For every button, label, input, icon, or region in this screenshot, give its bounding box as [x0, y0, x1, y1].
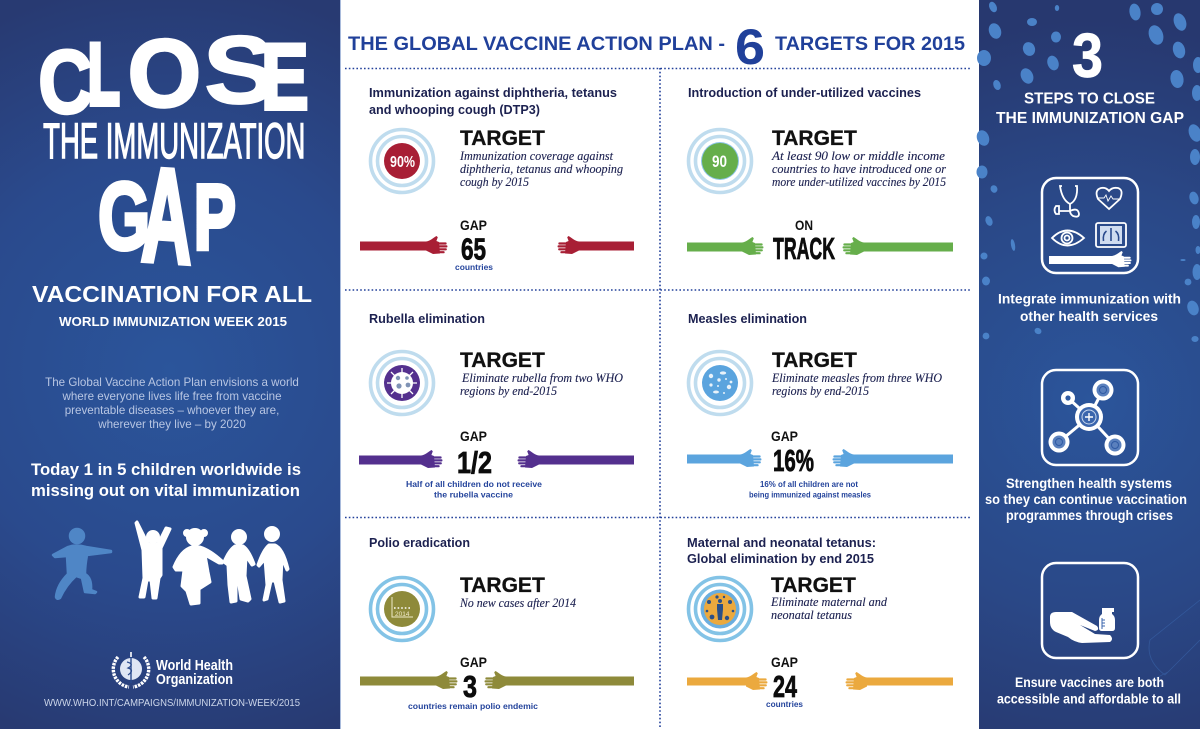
- title: Close the Immunization Gap brush lettering: S: [202, 16, 278, 125]
- heading: six targets for 2015: 6: [735, 19, 765, 75]
- subtitle: vaccination for all: VACCINATION FOR ALL: [32, 281, 312, 307]
- subtitle: vaccination for all: WORLD IMMUNIZATION WEEK 2015: [59, 315, 287, 329]
- title: Close the Immunization Gap brush lettering: A: [140, 141, 193, 292]
- icon: polio 2014 circle: 2014: [395, 611, 410, 618]
- panel: maternal and neonatal tetanus target: Maternal and neonatal tetanus:: [687, 536, 876, 550]
- number: 3 steps: 3: [1072, 22, 1103, 91]
- title: Close the Immunization Gap brush lettering: C: [37, 32, 94, 134]
- panel: left blue column background: [0, 0, 340, 729]
- title: Close the Immunization Gap brush lettering: G: [98, 163, 150, 270]
- panel: measles target: being immunized against measles: [749, 490, 871, 500]
- icon: reaching hands purple: [359, 450, 634, 468]
- panel: measles target: Eliminate measles from three WHO: [771, 371, 942, 385]
- panel: DTP3 target: TARGET: [460, 127, 545, 150]
- panel: maternal and neonatal tetanus target: Global elimination by end 2015: [687, 552, 874, 566]
- icon: 90 percent target circle: 90%: [390, 154, 415, 171]
- icon: reaching hands red: [360, 236, 634, 254]
- text block: 1 in 5 children statement: missing out on vital immunization: [31, 482, 300, 500]
- title: Close the Immunization Gap brush lettering: E: [261, 24, 309, 129]
- text: World Health Organization wordmark: World Health: [156, 658, 233, 674]
- decorative: vaccine droplets pattern: [975, 0, 1200, 342]
- panel: polio target: No new cases after 2014: [459, 596, 576, 610]
- panel: rubella target: [359, 312, 634, 500]
- panel: polio target: TARGET: [460, 574, 545, 597]
- panel: DTP3 target: 65: [461, 232, 486, 266]
- icon: reaching hands green: [687, 237, 953, 255]
- panel: rubella target: Half of all children do not receive: [406, 479, 542, 489]
- panel: maternal and neonatal tetanus target: TARGET: [771, 574, 856, 597]
- icon: mother and child circle: [688, 578, 752, 640]
- panel: maternal and neonatal tetanus target: [687, 536, 953, 709]
- text: integrate immunization caption: [998, 292, 1181, 324]
- panel: polio target: GAP: [460, 654, 487, 670]
- icon: polio 2014 circle: [370, 578, 434, 640]
- panel: under-utilized vaccines target: countries to have introduced one or: [772, 162, 946, 176]
- heading: six targets for 2015: [348, 19, 965, 75]
- icon: reaching hands olive: [360, 671, 634, 689]
- text block: 1 in 5 children statement: Today 1 in 5 children worldwide is: [31, 461, 301, 479]
- icon: rubella virus circle: [370, 352, 434, 414]
- panel: under-utilized vaccines target: Introduction of under-utilized vaccines: [688, 86, 921, 100]
- panel: under-utilized vaccines target: [687, 86, 953, 266]
- subtitle: vaccination for all: [32, 281, 312, 329]
- heading: six targets for 2015: THE GLOBAL VACCINE ACTION PLAN -: [348, 33, 725, 55]
- text: integrate immunization caption: Integrate immunization with: [998, 292, 1181, 306]
- panel: maternal and neonatal tetanus target: GAP: [771, 654, 798, 670]
- panel: under-utilized vaccines target: TRACK: [773, 231, 835, 266]
- text: ensure vaccines caption: Ensure vaccines are both: [1015, 675, 1164, 690]
- panel: under-utilized vaccines target: ON: [795, 217, 813, 233]
- title: Close the Immunization Gap brush lettering: L: [88, 27, 120, 123]
- text block: vision paragraph: preventable diseases – whoever they are,: [65, 404, 279, 417]
- panel: rubella target: TARGET: [460, 349, 545, 372]
- icon: health systems network box: [1042, 370, 1138, 465]
- icon: 90 countries target circle: 90: [712, 152, 727, 171]
- panel: maternal and neonatal tetanus target: neonatal tetanus: [771, 608, 852, 622]
- panel: polio target: countries remain polio endemic: [408, 701, 538, 711]
- panel: maternal and neonatal tetanus target: countries: [766, 699, 803, 709]
- panel: centre white targets column: [340, 0, 979, 729]
- icon: hand holding vaccine vial box: [1042, 563, 1138, 658]
- panel: measles target: 16%: [773, 443, 814, 478]
- panel: DTP3 target: GAP: [460, 217, 487, 233]
- panel: maternal and neonatal tetanus target: 24: [773, 669, 798, 704]
- text block: 1 in 5 children statement: [31, 461, 301, 500]
- icon: reaching hands orange: [687, 672, 953, 690]
- text: campaign URL: WWW.WHO.INT/CAMPAIGNS/IMMUNIZATION-WEEK/2015: [44, 697, 300, 709]
- text block: vision paragraph: wherever they live – by 2020: [97, 418, 246, 431]
- panel: DTP3 target: Immunization coverage against: [459, 149, 614, 163]
- text block: vision paragraph: [45, 376, 299, 431]
- title: Close the Immunization Gap brush lettering: [37, 16, 309, 292]
- panel: DTP3 target: and whooping cough (DTP3): [369, 103, 540, 117]
- text: integrate immunization caption: other health services: [1020, 309, 1158, 324]
- title: Close the Immunization Gap brush lettering: THE IMMUNIZATION: [43, 113, 305, 169]
- text block: vision paragraph: where everyone lives life free from vaccine: [61, 390, 282, 403]
- heading: steps to close the immunization gap: THE IMMUNIZATION GAP: [996, 110, 1184, 127]
- icon: five children silhouettes: [53, 522, 288, 604]
- panel: rubella target: 1/2: [457, 445, 492, 480]
- panel: rubella target: regions by end-2015: [460, 384, 557, 398]
- panel: maternal and neonatal tetanus target: Eliminate maternal and: [770, 595, 888, 609]
- icon: 90 percent target circle: [370, 130, 434, 192]
- panel: under-utilized vaccines target: At least 90 low or middle income: [771, 149, 945, 163]
- title: Close the Immunization Gap brush lettering: O: [127, 20, 202, 128]
- panel: polio target: Polio eradication: [369, 536, 470, 550]
- panel: DTP3 target: cough by 2015: [460, 175, 529, 189]
- panel: measles target: [687, 312, 953, 500]
- panel: polio target: 3: [463, 669, 477, 704]
- panel: DTP3 target: [360, 86, 634, 272]
- panel: measles target: TARGET: [772, 349, 857, 372]
- panel: DTP3 target: diphtheria, tetanus and whooping: [460, 162, 623, 176]
- panel: rubella target: GAP: [460, 428, 487, 444]
- text: World Health Organization wordmark: Organization: [156, 672, 233, 688]
- panel: rubella target: Eliminate rubella from two WHO: [461, 371, 623, 385]
- panel: rubella target: the rubella vaccine: [434, 490, 513, 500]
- heading: six targets for 2015: TARGETS FOR 2015: [775, 33, 965, 55]
- icon: integrated health services box: [1042, 178, 1138, 273]
- panel: measles target: Measles elimination: [688, 312, 807, 326]
- panel: measles target: 16% of all children are not: [760, 479, 858, 489]
- text: strengthen health systems caption: [985, 476, 1187, 523]
- text: ensure vaccines caption: accessible and affordable to all: [997, 692, 1181, 706]
- heading: steps to close the immunization gap: [996, 90, 1184, 127]
- panel: under-utilized vaccines target: TARGET: [772, 127, 857, 150]
- text: ensure vaccines caption: [997, 675, 1181, 706]
- icon: reaching hands blue: [687, 449, 953, 467]
- panel: under-utilized vaccines target: more under-utilized vaccines by 2015: [772, 175, 946, 189]
- panel: measles target: GAP: [771, 428, 798, 444]
- icon: 90 countries target circle: [688, 130, 752, 192]
- panel: DTP3 target: countries: [455, 262, 493, 272]
- text: World Health Organization wordmark: [156, 658, 233, 688]
- panel: polio target: [360, 536, 634, 711]
- icon: World Health Organization emblem: [113, 652, 149, 687]
- text: strengthen health systems caption: programmes through crises: [1006, 508, 1173, 523]
- text: strengthen health systems caption: so they can continue vaccination: [985, 492, 1187, 507]
- icon: measles cells circle: [688, 352, 752, 414]
- text block: vision paragraph: The Global Vaccine Action Plan envisions a world: [45, 376, 299, 389]
- panel: right blue steps column background: [979, 0, 1200, 729]
- text: strengthen health systems caption: Strengthen health systems: [1006, 476, 1172, 491]
- title: Close the Immunization Gap brush lettering: P: [194, 167, 236, 269]
- panel: DTP3 target: Immunization against diphtheria, tetanus: [369, 86, 617, 100]
- panel: measles target: regions by end-2015: [772, 384, 869, 398]
- heading: steps to close the immunization gap: STEPS TO CLOSE: [1024, 90, 1155, 108]
- panel: rubella target: Rubella elimination: [369, 312, 485, 326]
